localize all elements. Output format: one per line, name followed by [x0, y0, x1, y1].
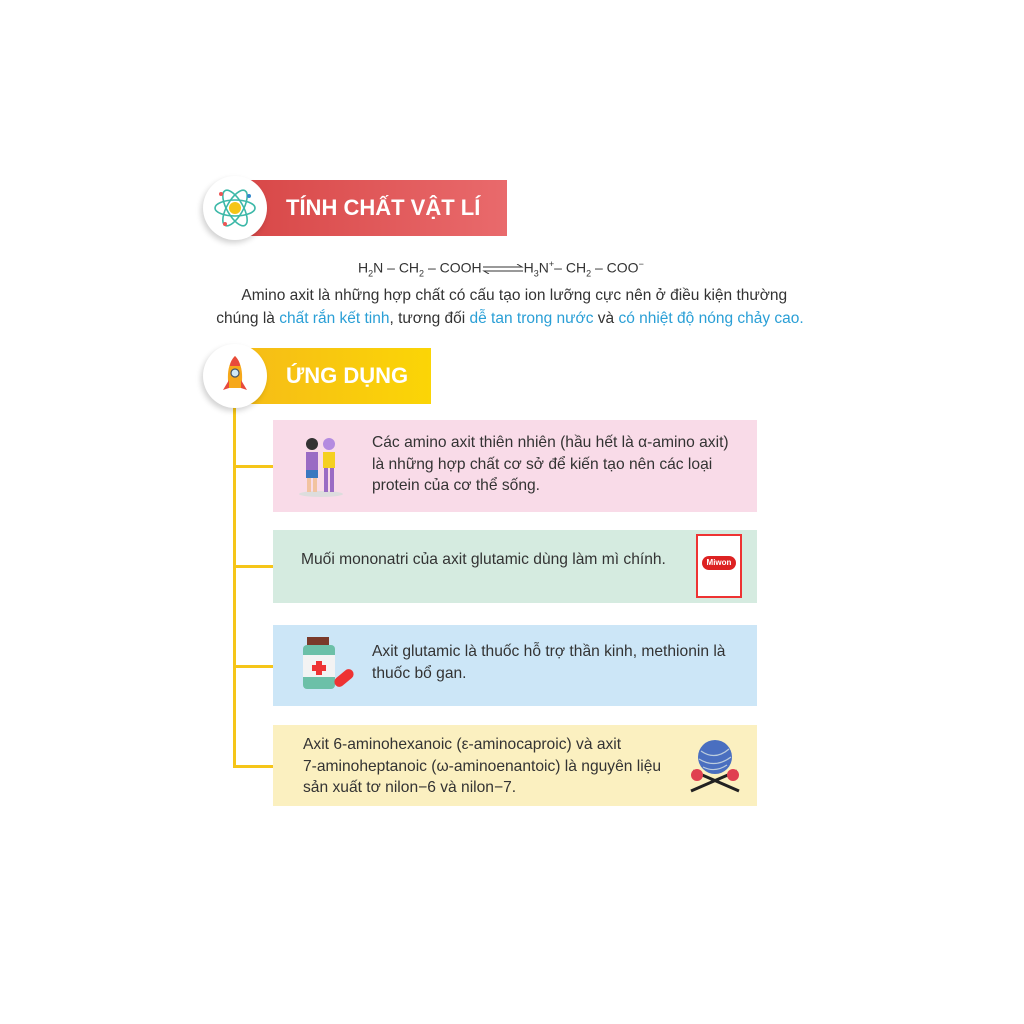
- panel: MSG: [273, 530, 757, 603]
- banner: ứng dụng: [248, 348, 431, 404]
- text: physical properties paragraph: chúng là chất rắn kết tinh, tương đối dễ tan trong nước và có nhiệt độ nóng chảy cao.: [216, 310, 804, 327]
- text: Axit glutamic là thuốc hỗ trợ thần kinh, methionin là: [372, 643, 725, 660]
- formula: H2N – CH2 – COOH H3N+– CH2 – COO−: [358, 259, 644, 278]
- icon: miwon package: [696, 534, 742, 598]
- timeline line: [233, 395, 236, 768]
- icon: atom: [203, 176, 267, 240]
- text: [303, 736, 661, 796]
- panel: nylon: [273, 725, 757, 806]
- text: physical properties paragraph: Amino axit là những hợp chất có cấu tạo ion lưỡng cực nên ở điều kiện thường: [241, 287, 787, 304]
- text: physical properties paragraph: [216, 287, 804, 327]
- connectors: [234, 465, 273, 468]
- banner: tính chất vật lí: TÍNH CHẤT VẬT LÍ: [286, 195, 480, 220]
- panel: medicine: [273, 625, 757, 706]
- panel: protein: [273, 420, 757, 512]
- text: thuốc bổ gan.: [372, 664, 467, 682]
- text: Các amino axit thiên nhiên (hầu hết là α-amino axit): [372, 434, 729, 451]
- banner: ứng dụng: ỨNG DỤNG: [286, 363, 408, 388]
- icon: yarn ball: [690, 740, 740, 792]
- text: [372, 642, 726, 682]
- text: Axit 6-aminohexanoic (ε-aminocaproic) và axit: [303, 736, 621, 753]
- text: 7-aminoheptanoic (ω-aminoenantoic) là nguyên liệu: [303, 758, 661, 774]
- text: [372, 434, 729, 494]
- icon: rocket: [203, 344, 267, 408]
- banner: tính chất vật lí: [248, 180, 507, 236]
- text: Muối mononatri của axit glutamic dùng làm mì chính.: [301, 551, 666, 568]
- icon: people: [299, 438, 343, 497]
- icon: miwon package: Miwon: [707, 558, 731, 567]
- text: sản xuất tơ nilon−6 và nilon−7.: [303, 779, 516, 796]
- text: protein của cơ thể sống.: [372, 477, 540, 494]
- text: là những hợp chất cơ sở để kiến tạo nên các loại: [372, 456, 712, 472]
- icon: medicine bottle: [303, 637, 354, 689]
